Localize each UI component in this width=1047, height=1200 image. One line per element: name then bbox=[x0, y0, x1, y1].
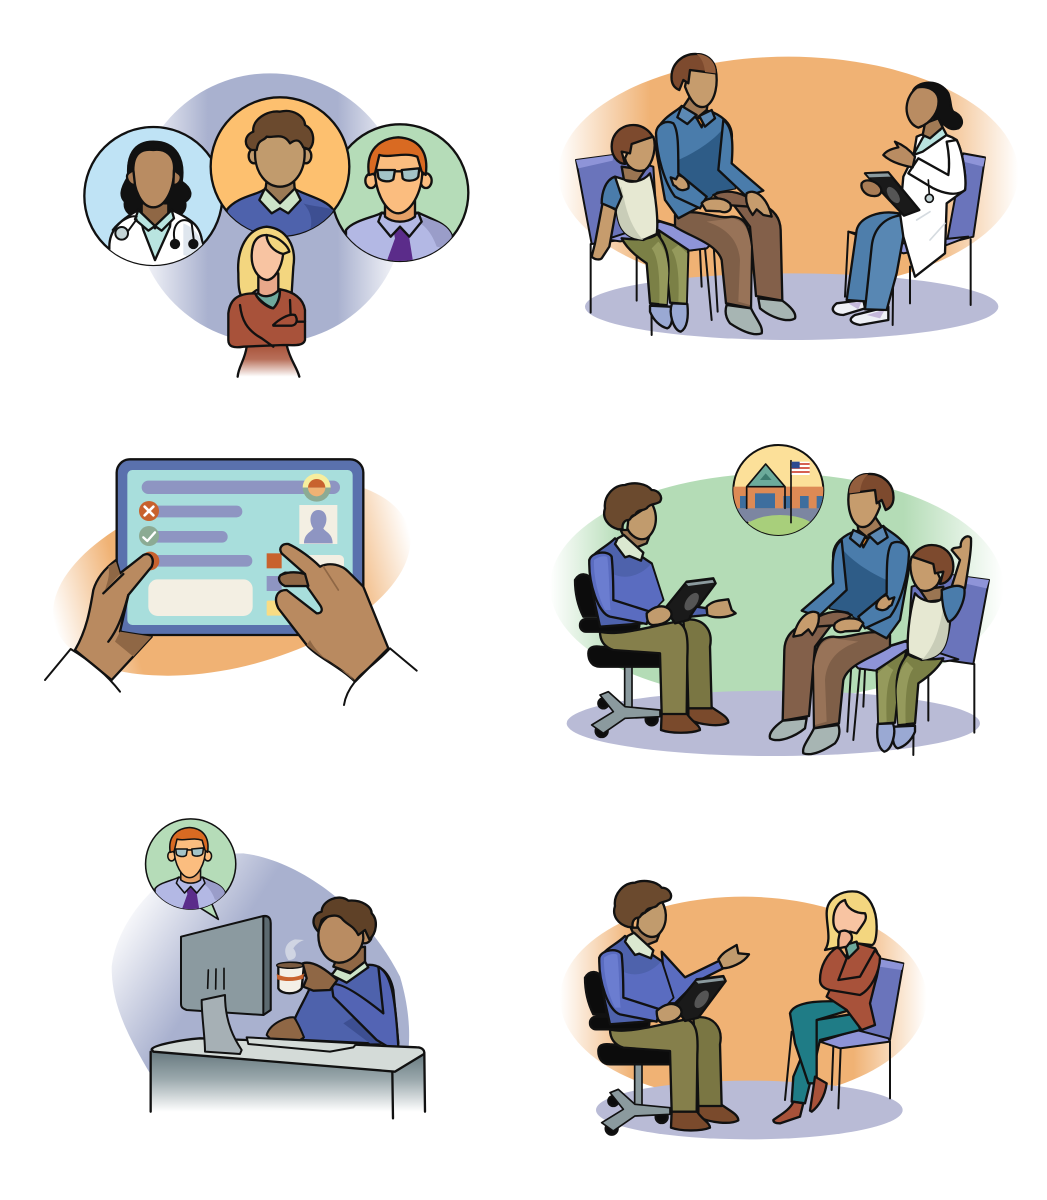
floor ellipse bbox=[596, 1081, 903, 1139]
orange background bbox=[558, 57, 1018, 290]
panel: care team avatars bbox=[84, 73, 468, 377]
hand: right bbox=[276, 544, 388, 682]
tablet frame bbox=[117, 459, 363, 635]
panel: family meets doctor bbox=[558, 54, 1018, 340]
orange background bbox=[31, 442, 432, 711]
panel: consultation with woman bbox=[560, 881, 927, 1139]
avatar: curly-haired man bbox=[211, 97, 349, 240]
figure: man at desk bbox=[277, 898, 398, 1050]
computer monitor bbox=[181, 916, 271, 1054]
panel: school meeting bbox=[550, 445, 1003, 756]
panel: video call at desk bbox=[112, 819, 425, 1118]
desk bbox=[151, 1038, 425, 1118]
blue background circle bbox=[135, 73, 405, 343]
icon: school badge bbox=[732, 444, 824, 536]
figure: father bbox=[656, 54, 795, 334]
gesturing arm bbox=[690, 599, 736, 617]
floor ellipse bbox=[567, 691, 980, 756]
chairs: family bbox=[847, 575, 989, 755]
shirt cuffs bbox=[45, 648, 417, 705]
avatar: doctor bbox=[84, 127, 222, 267]
chair: doctor bbox=[845, 153, 985, 325]
blue background bbox=[112, 853, 409, 1073]
gesturing sleeve bbox=[662, 952, 723, 1003]
avatar: glasses man bbox=[332, 124, 468, 268]
figure: therapist with tablet bbox=[585, 881, 738, 1135]
green background bbox=[550, 473, 1003, 700]
figure: woman bbox=[773, 891, 880, 1123]
panel: tablet with hands bbox=[31, 442, 432, 711]
figure: woman with crossed arms bbox=[228, 227, 305, 377]
floor ellipse bbox=[585, 273, 998, 340]
gesturing hand bbox=[718, 945, 749, 968]
hand: left bbox=[75, 554, 153, 680]
chairs: family bbox=[576, 155, 718, 335]
figure: therapist with tablet bbox=[575, 483, 736, 737]
figure: boy, mirrored, arm raised bbox=[877, 536, 971, 752]
orange background bbox=[560, 897, 927, 1100]
figure: father, mirrored bbox=[770, 474, 909, 754]
keyboard and hand bbox=[247, 1017, 357, 1052]
tablet screen bbox=[127, 470, 353, 625]
speech bubble: glasses man bbox=[146, 819, 236, 919]
chair: woman bbox=[785, 958, 903, 1108]
figure: boy bbox=[592, 125, 688, 332]
boy's raised arm bbox=[942, 536, 971, 622]
figure: doctor with tablet bbox=[833, 83, 965, 325]
